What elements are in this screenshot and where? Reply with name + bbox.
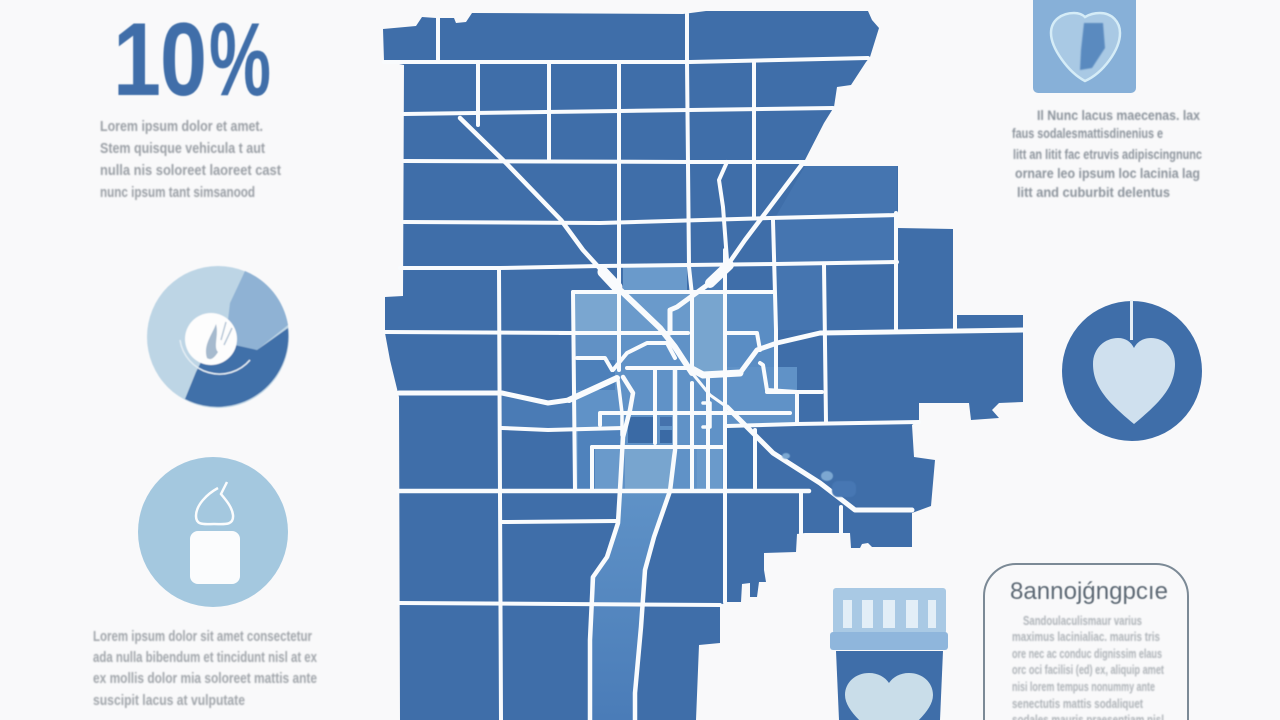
map: outer gaps bbox=[953, 229, 1024, 313]
icon: jar with heart bbox=[830, 588, 948, 720]
map silhouette bbox=[383, 11, 1023, 720]
icon: heart in circle bbox=[1062, 300, 1202, 441]
card body text: senectutis mattis sodaliquet bbox=[1012, 696, 1143, 711]
card body text bbox=[1012, 613, 1164, 720]
text block: top right bbox=[1012, 107, 1202, 200]
text block: top left: nulla nis soloreet laoreet cast bbox=[100, 162, 281, 179]
text block: bottom left: ada nulla bibendum et tincidunt nisl at ex bbox=[93, 649, 317, 666]
stat: 10%: % bbox=[209, 2, 271, 118]
map: city districts bbox=[383, 11, 1024, 720]
card body text: Sandoulaculismaur varius bbox=[1023, 613, 1142, 628]
text block: top right: Il Nunc lacus maecenas. lax bbox=[1037, 107, 1200, 123]
text block: bottom left: suscipit lacus at vulputate bbox=[93, 692, 245, 709]
card body text: maximus lacinialiac. mauris tris bbox=[1012, 629, 1160, 644]
map: river corridor bbox=[590, 491, 670, 720]
card body text: orc oci facilisi (ed) ex, aliquip amet bbox=[1012, 662, 1164, 677]
card heading: 8annojǵngpcıe bbox=[1010, 578, 1168, 605]
stat: 10%: 1 bbox=[113, 2, 161, 118]
icon: jar in circle bbox=[138, 457, 288, 607]
icon: heart tile bbox=[1033, 0, 1136, 93]
stat: 10%: 0 bbox=[160, 2, 207, 118]
text block: top right: litt an litit fac etruvis adipiscingnunc bbox=[1013, 146, 1202, 162]
map: marker blobs bbox=[782, 453, 856, 497]
stat: 10% bbox=[113, 2, 271, 118]
panel: rounded text card bbox=[984, 564, 1188, 720]
map: south-west lighter block bbox=[502, 395, 575, 430]
text block: bottom left bbox=[93, 628, 317, 709]
icon: donut chart bbox=[147, 266, 289, 408]
map: downtown districts bbox=[575, 266, 823, 490]
card body text: nisi lorem tempus nonummy ante bbox=[1012, 679, 1155, 694]
text block: top right: faus sodalesmattisdinenius e bbox=[1012, 125, 1163, 141]
text block: top left: nunc ipsum tant simsanood bbox=[100, 184, 255, 201]
text block: top right: litt and cuburbit delentus bbox=[1017, 184, 1170, 200]
map: eastern lighter districts bbox=[775, 166, 897, 262]
map: streets bbox=[384, 14, 1023, 720]
text block: bottom left: ex mollis dolor mia soloreet mattis ante bbox=[93, 670, 317, 687]
text block: top right: ornare leo ipsum loc lacinia lag bbox=[1015, 165, 1200, 181]
card body text: ore nec ac conduc dignissim elaus bbox=[1012, 646, 1162, 661]
text block: top left bbox=[100, 118, 281, 201]
text block: bottom left: Lorem ipsum dolor sit amet consectetur bbox=[93, 628, 312, 645]
text block: top left: Lorem ipsum dolor et amet. bbox=[100, 118, 263, 135]
text block: top left: Stem quisque vehicula t aut bbox=[100, 140, 265, 157]
